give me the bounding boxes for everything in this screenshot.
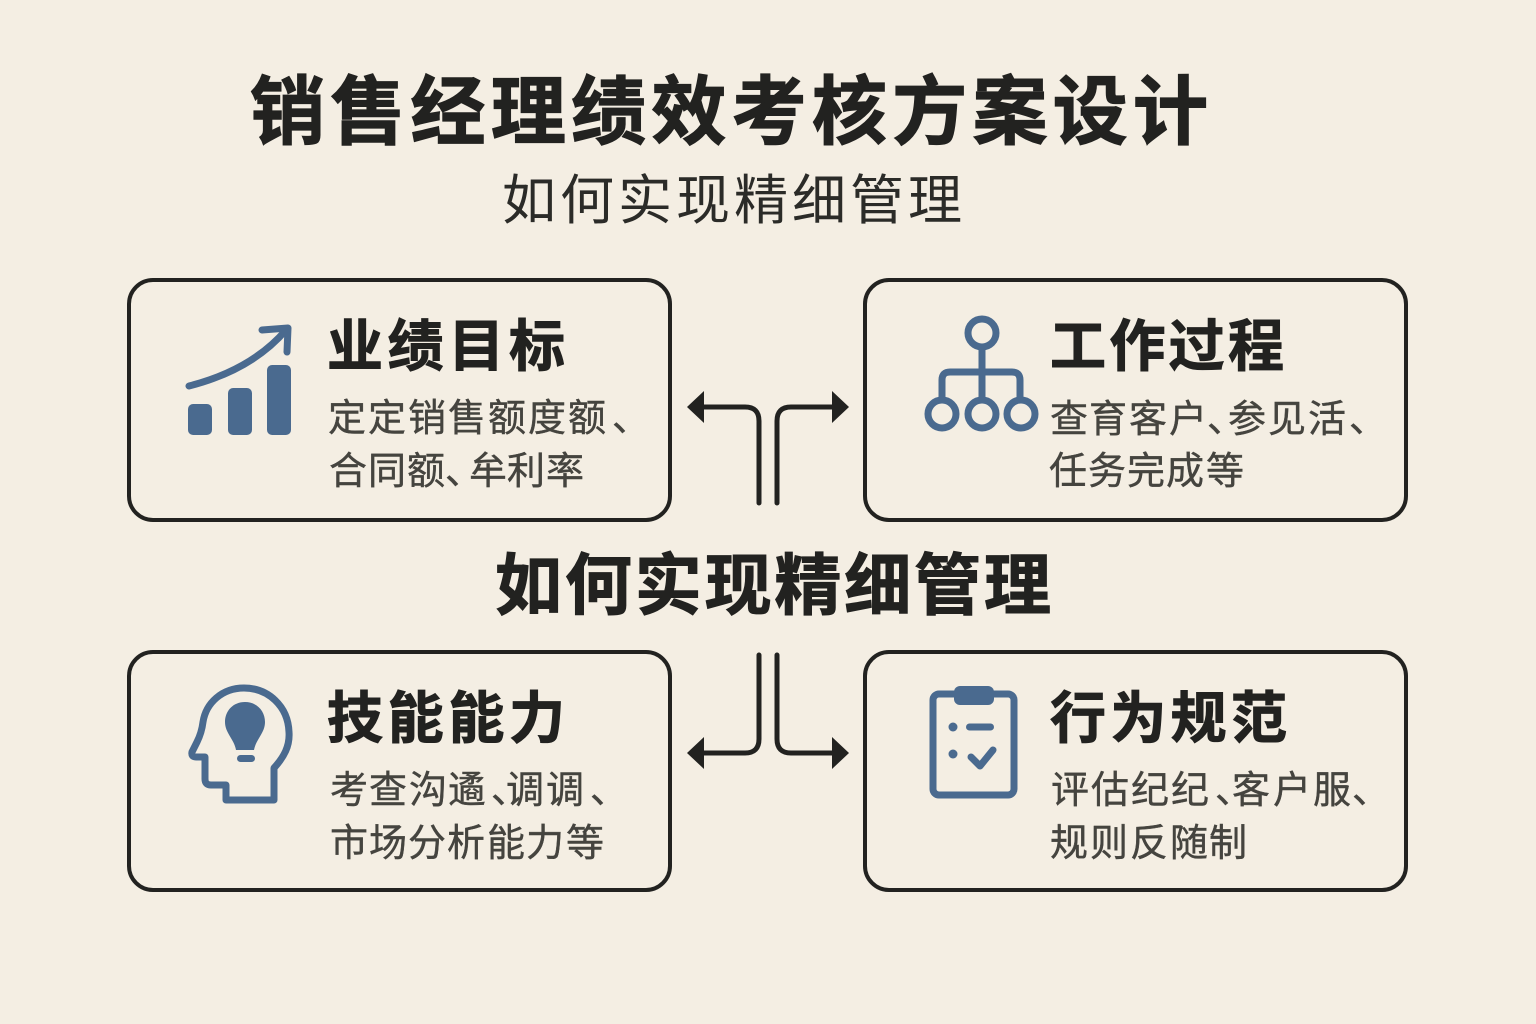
body text: 工作过程: 任务完成等: [1049, 451, 1244, 493]
body text: 行为规范: 规则反随制: [1050, 823, 1247, 865]
arrows: upper connector: [687, 391, 849, 503]
panel: 行为规范: [865, 652, 1406, 890]
body text: 行为规范: 评估纪纪、客户服、: [1051, 770, 1390, 812]
icon: clipboard checklist: [933, 686, 1014, 795]
body text: 工作过程: 查育客户、参见活、: [1050, 399, 1387, 441]
panel: 工作过程: [865, 280, 1406, 520]
body text: 业绩目标: [328, 398, 650, 493]
body text: 技能能力: 市场分析能力等: [330, 823, 604, 865]
body text: 工作过程: [1049, 399, 1387, 493]
icon: rising bar chart with arrow: [188, 328, 291, 435]
center heading: 如何实现精细管理: [495, 549, 1051, 624]
body text: 业绩目标: 定定销售额度额、: [328, 398, 650, 440]
icon: head with light bulb: [192, 688, 289, 800]
body text: 业绩目标: 合同额、牟利率: [329, 451, 584, 493]
heading: 行为规范: 行为规范: [1050, 687, 1287, 750]
body text: 技能能力: 考查沟遹、调调、: [330, 770, 628, 812]
subtitle: 如何实现精细管理: [502, 171, 962, 231]
panel: 技能能力: [129, 652, 670, 890]
panel: 业绩目标: [129, 280, 670, 520]
arrows: lower connector: [687, 655, 849, 769]
body text: 技能能力: [330, 770, 628, 865]
title: 销售经理绩效考核方案设计: [250, 70, 1208, 154]
heading: 工作过程: 工作过程: [1050, 315, 1284, 378]
icon: hierarchy tree: [928, 319, 1035, 428]
body text: 行为规范: [1050, 770, 1390, 865]
heading: 技能能力: 技能能力: [327, 687, 565, 750]
heading: 业绩目标: 业绩目标: [327, 315, 565, 378]
